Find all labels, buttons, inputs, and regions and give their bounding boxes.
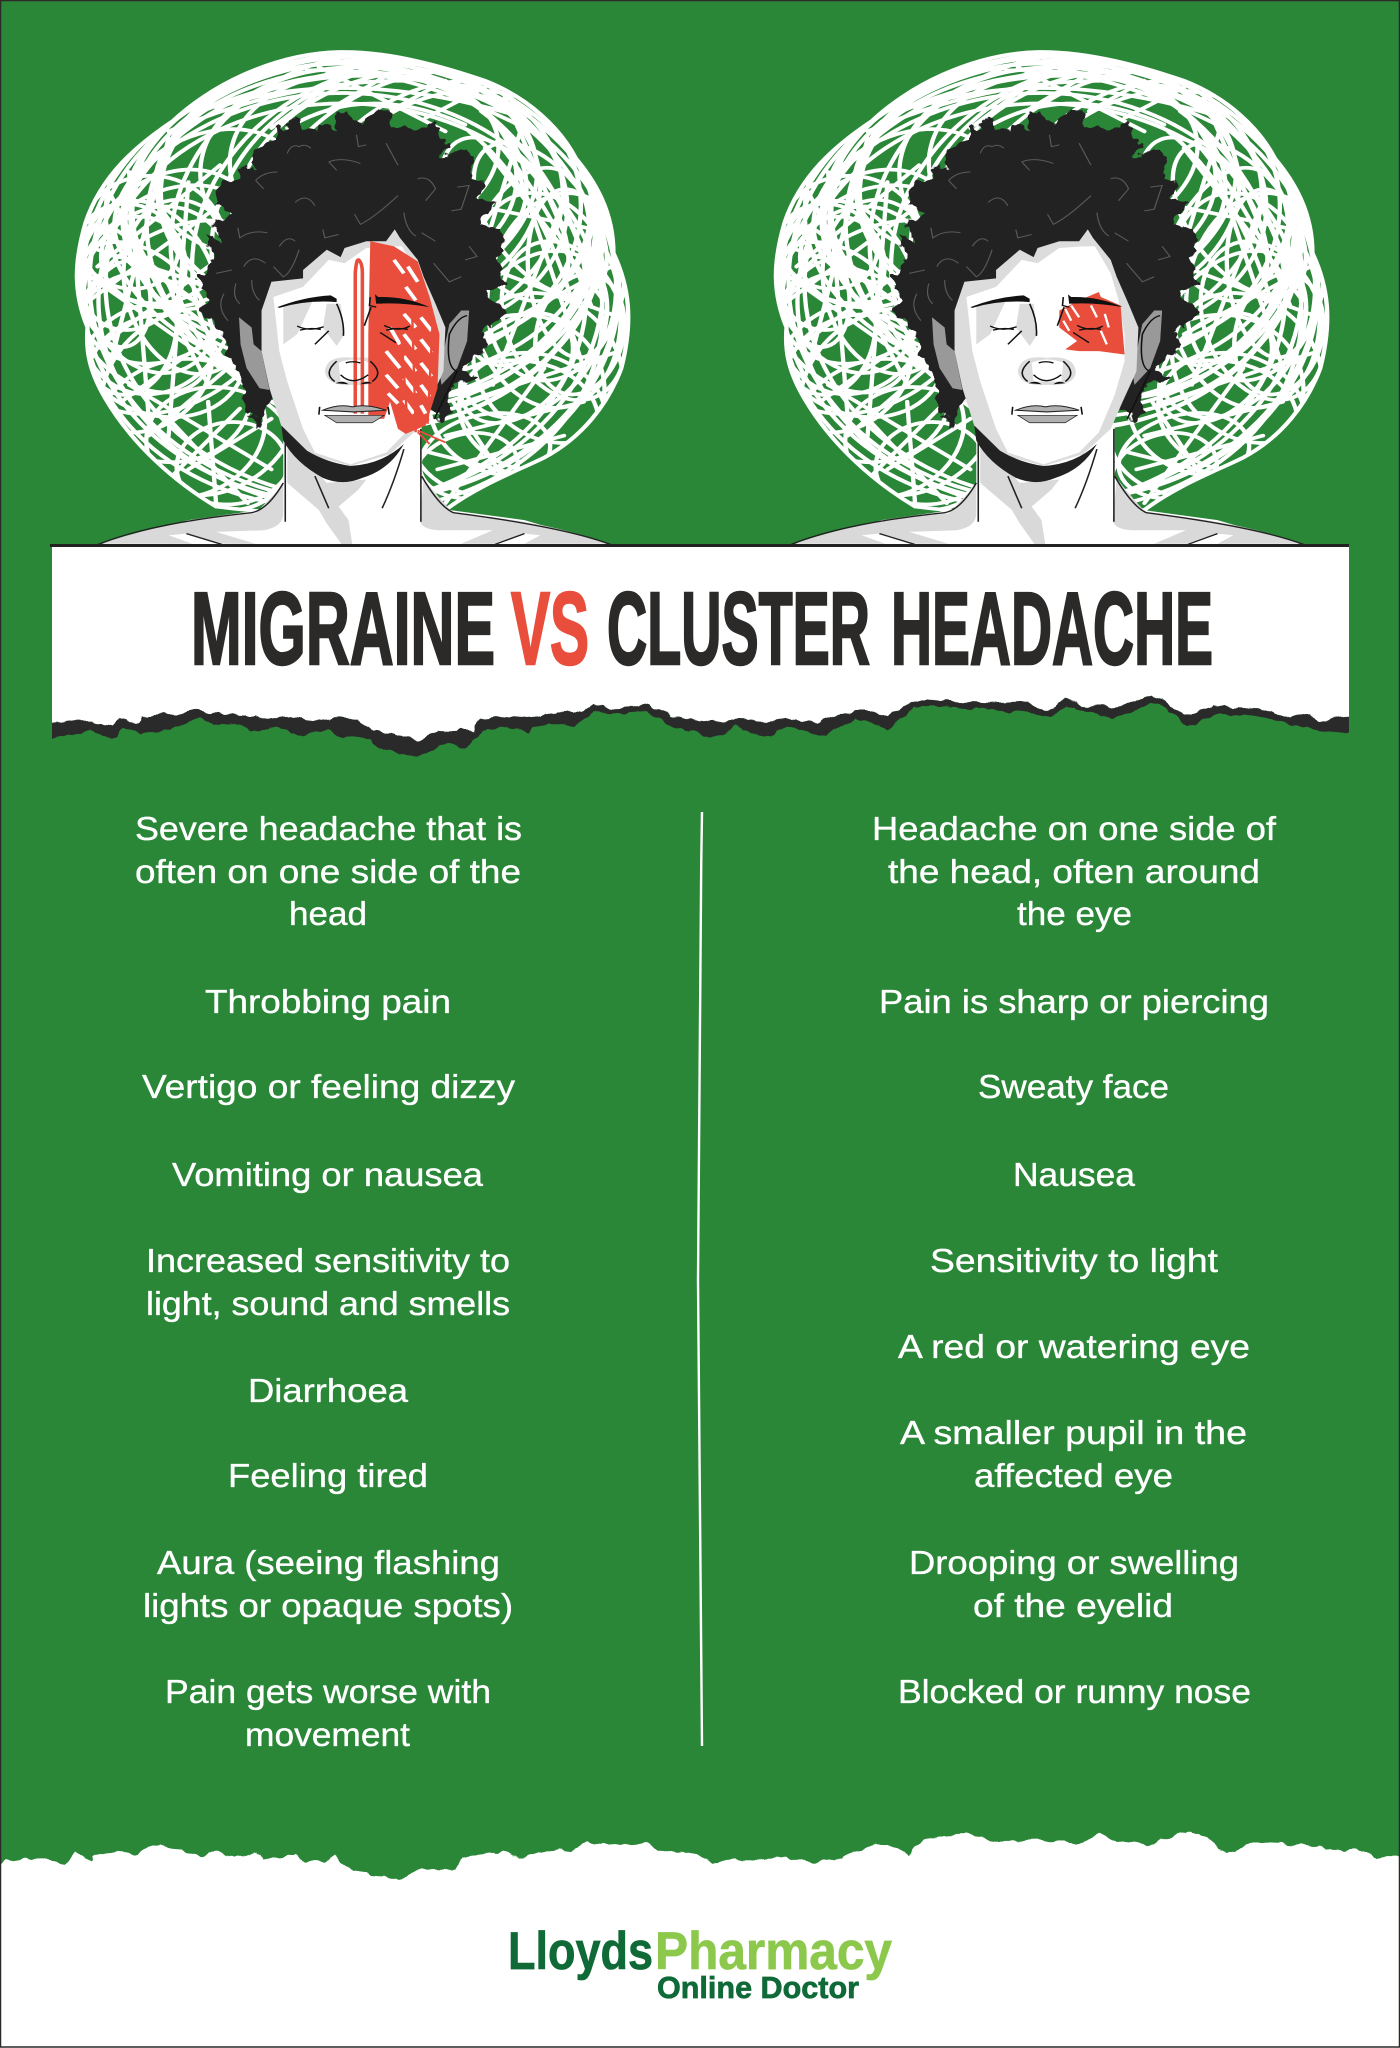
symptom: sharp pain: Pain is sharp or piercing <box>879 983 1269 1020</box>
symptom: aura: Aura (seeing flashing <box>157 1544 500 1581</box>
symptom: blocked nose: Blocked or runny nose <box>898 1673 1251 1710</box>
head and shoulders: cluster headache <box>790 108 1304 545</box>
column: migraine symptoms <box>135 810 522 1753</box>
symptom: sensitivity: light, sound and smells <box>146 1285 510 1322</box>
symptom: sensitivity: Increased sensitivity to <box>146 1242 510 1279</box>
banner torn paper <box>32 540 1371 757</box>
title: migraine vs cluster headache: MIGRAINE <box>191 571 495 686</box>
symptom: sensitivity <box>146 1242 510 1322</box>
scribble halo: migraine <box>14 0 687 568</box>
scribble halo: cluster headache <box>713 0 1386 568</box>
head and shoulders: migraine <box>97 108 611 545</box>
symptom: drooping eyelid: of the eyelid <box>973 1587 1173 1624</box>
symptom: severe headache: head <box>289 895 367 932</box>
symptom: one-sided headache <box>872 810 1277 932</box>
title banner <box>32 540 1371 757</box>
symptom: one-sided headache: the eye <box>1017 895 1132 932</box>
logo: LloydsPharmacy Online Doctor: Online Doctor <box>657 1970 859 2005</box>
symptom: aura <box>143 1544 513 1624</box>
column divider <box>698 812 702 1746</box>
symptom: severe headache <box>135 810 522 932</box>
symptom: smaller pupil: A smaller pupil in the <box>900 1414 1247 1451</box>
footer torn white panel <box>0 1832 1400 2048</box>
symptom: pain worsens with movement <box>165 1673 491 1753</box>
symptom: sweaty face: Sweaty face <box>978 1068 1169 1105</box>
symptom: drooping eyelid <box>909 1544 1239 1624</box>
symptom: drooping eyelid: Drooping or swelling <box>909 1544 1239 1581</box>
title: migraine vs cluster headache: CLUSTER <box>607 571 870 686</box>
symptom: severe headache: often on one side of the <box>135 853 521 890</box>
column: cluster headache symptoms <box>872 810 1277 1710</box>
logo: LloydsPharmacy Online Doctor: Pharmacy <box>655 1922 892 1981</box>
symptom: pain worsens with movement: movement <box>245 1716 410 1753</box>
title: migraine vs cluster headache <box>191 571 1213 686</box>
symptom: vertigo: Vertigo or feeling dizzy <box>142 1068 516 1105</box>
symptom: pain worsens with movement: Pain gets worse with <box>165 1673 491 1710</box>
symptom: smaller pupil: affected eye <box>974 1457 1173 1494</box>
symptom: one-sided headache: Headache on one side of <box>872 810 1277 847</box>
symptom: throbbing pain: Throbbing pain <box>205 983 451 1020</box>
symptom: severe headache: Severe headache that is <box>135 810 522 847</box>
facial features: cluster headache <box>970 294 1160 423</box>
title: migraine vs cluster headache: VS <box>511 571 589 686</box>
symptom: diarrhoea: Diarrhoea <box>248 1372 409 1409</box>
symptom: red or watering eye: A red or watering eye <box>898 1328 1250 1365</box>
symptom: smaller pupil <box>900 1414 1247 1494</box>
pain marker: red scribble across half of face <box>355 241 445 444</box>
facial features: migraine <box>277 294 467 423</box>
symptom: one-sided headache: the head, often around <box>888 853 1260 890</box>
banner top rule <box>50 544 1349 547</box>
illustration: cluster headache figure <box>713 0 1386 568</box>
symptom: sensitivity to light: Sensitivity to light <box>930 1242 1218 1279</box>
illustration: migraine figure <box>14 0 687 568</box>
symptom: vomiting: Vomiting or nausea <box>172 1156 484 1193</box>
symptom: feeling tired: Feeling tired <box>228 1457 428 1494</box>
symptom: aura: lights or opaque spots) <box>143 1587 513 1624</box>
logo: LloydsPharmacy Online Doctor: Lloyds <box>508 1922 653 1981</box>
pain marker: red scribble around one eye <box>1059 292 1125 354</box>
logo: LloydsPharmacy Online Doctor <box>508 1922 892 2005</box>
symptom: nausea: Nausea <box>1013 1156 1136 1193</box>
